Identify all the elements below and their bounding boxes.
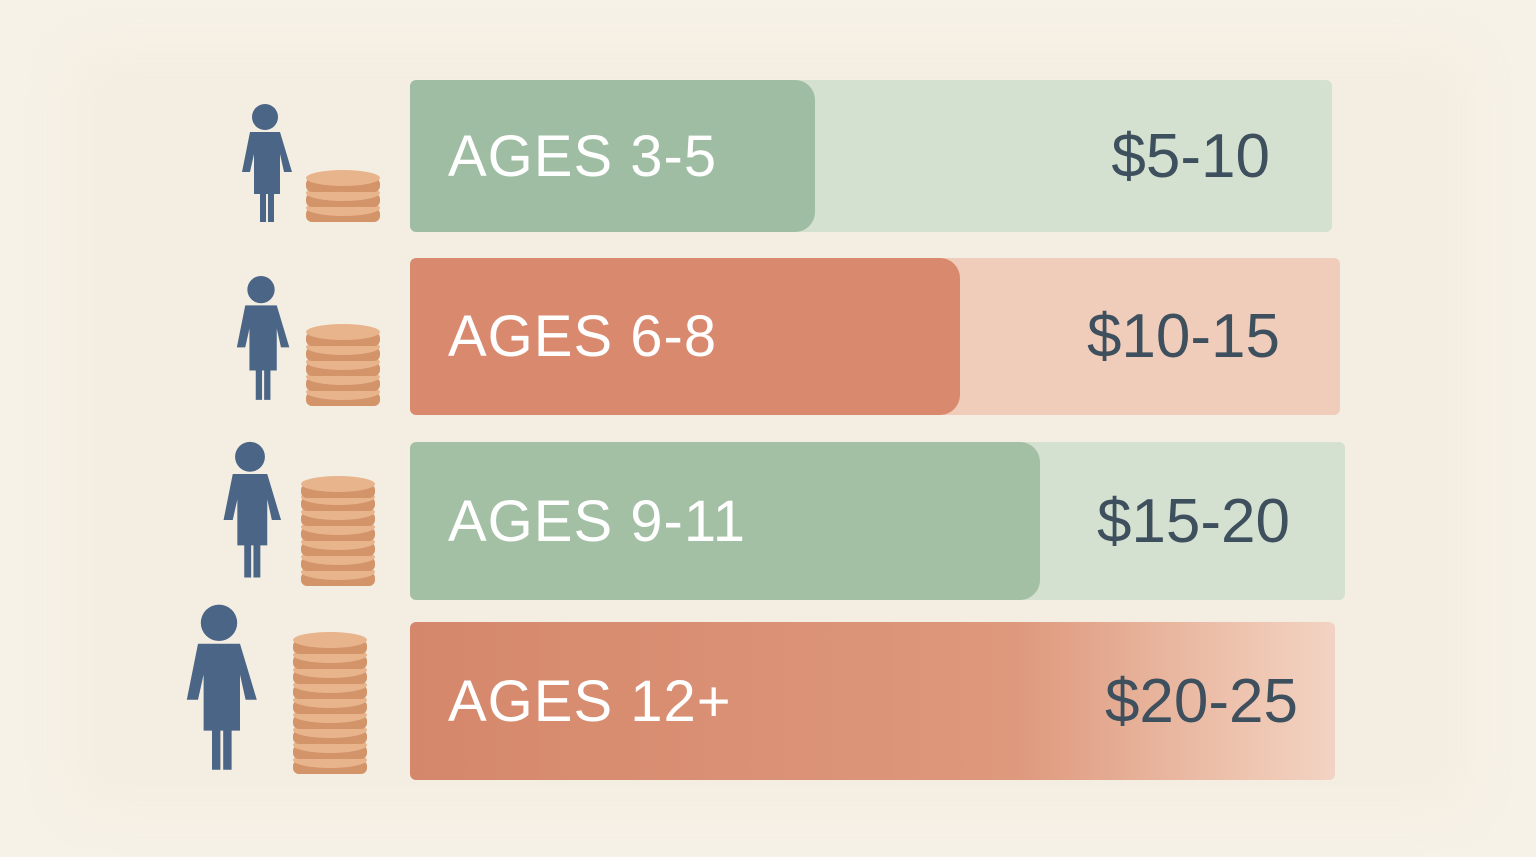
icon: child 3 [224,442,281,578]
icon: coins 4 [293,632,367,774]
row 4: ages 12+: AGES 12+ [448,668,732,734]
icon: child 2 [237,276,289,400]
row 2: ages 6-8: AGES 6-8 [448,304,717,369]
icon: coins 1 [306,170,380,222]
row 2: ages 6-8 [410,258,1340,415]
icon: child 1 [242,104,292,222]
row 4: ages 12+ [410,622,1335,780]
row 1: ages 3-5: $5-10 [1111,122,1270,190]
row 1: ages 3-5: AGES 3-5 [448,124,717,188]
row 2: ages 6-8: $10-15 [1087,302,1280,371]
row 3: ages 9-11 [410,442,1345,600]
icon: child 4 [187,605,257,770]
icon: coins 2 [306,324,380,406]
icon: coins 3 [301,476,375,586]
row 3: ages 9-11: $15-20 [1097,486,1290,556]
row 1: ages 3-5 [410,80,1332,232]
row 4: ages 12+: $20-25 [1105,666,1298,736]
row 3: ages 9-11: AGES 9-11 [448,488,746,554]
icons: children and coin stacks [186,104,380,774]
